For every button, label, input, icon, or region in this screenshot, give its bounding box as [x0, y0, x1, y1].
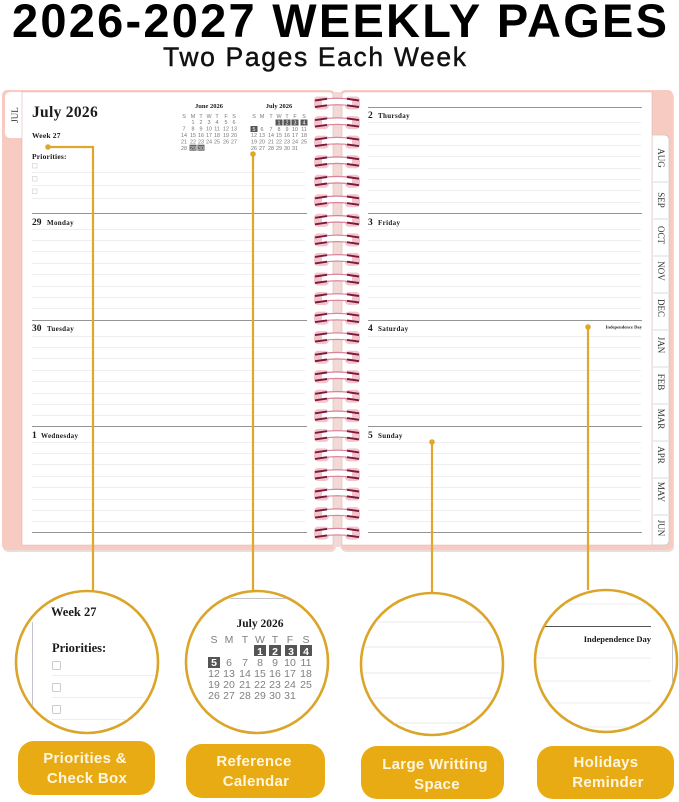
tab: JUL: JUL — [10, 107, 20, 123]
label: holidays reminder: Holidays — [574, 754, 638, 771]
mini calendar: July 2026: 18 — [301, 133, 307, 139]
label: large writing space — [361, 746, 504, 799]
tabs: months: APR — [656, 446, 666, 464]
mini calendar: July 2026: 25 — [301, 140, 307, 146]
label: priorities and check box — [18, 741, 155, 795]
mini calendar: July 2026: F — [293, 114, 297, 120]
magnifier: reference calendar: 10 — [284, 657, 296, 669]
mini calendar: July 2026: 13 — [259, 133, 265, 139]
mini calendar: June 2026: 15 — [190, 133, 196, 139]
magnifier: reference calendar: 22 — [254, 679, 266, 691]
label: large writing space: Large Writting — [382, 756, 488, 773]
magnifier: reference calendar: 15 — [254, 668, 266, 680]
mini calendar: July 2026: 24 — [292, 140, 298, 146]
tabs: months: AUG — [656, 148, 666, 168]
mini calendar: June 2026: T — [199, 114, 203, 120]
mini calendar: July 2026: S — [252, 114, 256, 120]
magnifier: reference calendar: S — [302, 634, 310, 646]
connector: reference calendar — [250, 151, 256, 592]
panel: right page — [342, 92, 652, 545]
day heading: Tuesday: Tuesday — [47, 325, 74, 333]
tab: JUL — [5, 92, 23, 138]
mini calendar: June 2026: 28 — [181, 146, 187, 152]
magnifier: reference calendar: 19 — [208, 679, 220, 691]
mini calendar: June 2026: 24 — [206, 140, 212, 146]
tabs: months: MAR — [656, 409, 666, 429]
mini calendar: June 2026: 29 — [190, 146, 196, 152]
label: holidays reminder: Reminder — [572, 774, 644, 791]
magnifier: reference calendar: 24 — [284, 679, 296, 691]
magnifier: priorities and check box — [16, 591, 158, 733]
mini calendar: June 2026: 3 — [208, 120, 210, 126]
magnifier: reference calendar: 2 — [272, 646, 278, 658]
mini calendar: June 2026: 11 — [214, 126, 220, 132]
mini calendar: July 2026: 11 — [301, 127, 307, 133]
mini calendar: July 2026: 17 — [292, 133, 298, 139]
day heading: Monday — [32, 218, 74, 228]
month heading: July 2026 — [32, 104, 98, 121]
mini calendar: July 2026 — [250, 103, 308, 152]
mini calendar: June 2026: June 2026 — [195, 103, 224, 110]
mini calendar: June 2026: 30 — [198, 146, 204, 152]
label: priorities and check box: Check Box — [47, 770, 127, 787]
magnifier: reference calendar: 8 — [257, 657, 263, 669]
mini calendar: July 2026: 10 — [292, 127, 298, 133]
mini calendar: June 2026: 27 — [231, 140, 237, 146]
label: reference calendar: Calendar — [223, 773, 289, 790]
magnifier: holidays reminder: Independence Day — [584, 634, 652, 644]
mini calendar: July 2026: 5 — [252, 127, 256, 133]
mini calendar: June 2026: 1 — [192, 120, 194, 126]
magnifier: large writing space — [355, 593, 510, 735]
magnifier: reference calendar: 6 — [226, 657, 232, 669]
mini calendar: July 2026: S — [302, 114, 306, 120]
mini calendar: June 2026: 20 — [231, 133, 237, 139]
mini calendar: June 2026: 7 — [182, 126, 186, 132]
mini calendar: July 2026: 9 — [286, 127, 288, 133]
tabs: months: DEC — [656, 299, 666, 317]
subtitle: Two Pages Each Week — [163, 42, 467, 72]
mini calendar: June 2026: 22 — [190, 140, 196, 146]
mini calendar: June 2026: 5 — [224, 120, 228, 126]
mini calendar: July 2026: 4 — [302, 120, 306, 126]
day heading: Monday: 29 — [32, 218, 42, 228]
tabs: months: OCT — [656, 226, 666, 245]
holiday note: Independence Day — [606, 324, 643, 330]
mini calendar: July 2026: 27 — [259, 146, 265, 152]
magnifier: reference calendar: W — [255, 634, 265, 646]
mini calendar: June 2026: 10 — [206, 126, 212, 132]
mini calendar: July 2026: 1 — [278, 120, 280, 126]
mini calendar: July 2026: 19 — [251, 140, 257, 146]
mini calendar: June 2026: 21 — [181, 140, 187, 146]
mini calendar: June 2026: 16 — [198, 133, 204, 139]
day heading: Monday: Monday — [47, 219, 74, 227]
label: holidays reminder — [537, 746, 674, 799]
magnifier: reference calendar: 12 — [208, 668, 220, 680]
mini calendar: July 2026: 15 — [276, 133, 282, 139]
mini calendar: July 2026: 20 — [259, 140, 265, 146]
mini calendar: June 2026: 26 — [223, 140, 229, 146]
tabs: months: MAY — [656, 482, 666, 503]
magnifier: reference calendar: M — [225, 634, 233, 646]
mini calendar: June 2026: W — [206, 114, 212, 120]
mini calendar: July 2026: 7 — [270, 127, 272, 133]
magnifier: reference calendar: F — [287, 634, 293, 646]
mini calendar: July 2026: July 2026 — [266, 103, 293, 110]
mini calendar: June 2026: 23 — [198, 140, 204, 146]
mini calendar: June 2026: 18 — [214, 133, 220, 139]
tabs: months: JAN — [656, 337, 666, 354]
magnifier: reference calendar: 4 — [303, 646, 309, 658]
tabs: months: FEB — [656, 374, 666, 390]
magnifier: reference calendar: 25 — [300, 679, 312, 691]
mini calendar: June 2026: T — [215, 114, 219, 120]
connector: holidays — [585, 324, 591, 590]
magnifier: reference calendar: 23 — [269, 679, 281, 691]
day heading: Wednesday — [32, 431, 79, 441]
mini calendar: July 2026: 29 — [276, 146, 282, 152]
mini calendar: June 2026: 17 — [206, 133, 212, 139]
mini calendar: July 2026: 21 — [268, 140, 274, 146]
mini calendar: June 2026: 6 — [232, 120, 236, 126]
tabs: months — [652, 135, 669, 545]
magnifier: reference calendar: 21 — [239, 679, 251, 691]
magnifier: reference calendar: 29 — [254, 690, 266, 702]
magnifier: reference calendar: 28 — [239, 690, 251, 702]
mini calendar: July 2026: 23 — [284, 140, 290, 146]
day heading: Wednesday: 1 — [32, 431, 37, 441]
mini calendar: July 2026: 26 — [251, 146, 257, 152]
mini calendar: July 2026: 31 — [292, 146, 298, 152]
magnifier: priorities and check box: Week 27 — [51, 605, 96, 619]
spiral binding — [314, 96, 360, 540]
mini calendar: June 2026: S — [182, 114, 186, 120]
day heading: Sunday: 5 — [368, 431, 373, 441]
magnifier: reference calendar: S — [210, 634, 218, 646]
mini calendar: June 2026: 4 — [216, 120, 218, 126]
magnifier: reference calendar: 11 — [301, 657, 312, 669]
mini calendar: July 2026: 8 — [278, 127, 280, 133]
day heading: Sunday — [368, 431, 403, 441]
magnifier: reference calendar: July 2026 — [237, 618, 284, 630]
day heading: Thursday — [368, 111, 410, 121]
magnifier: reference calendar: 1 — [257, 646, 263, 658]
mini calendar: June 2026: 8 — [192, 126, 194, 132]
day heading: Tuesday — [32, 324, 74, 334]
day heading: Saturday: 4 — [368, 324, 373, 334]
mini calendar: July 2026: 30 — [284, 146, 290, 152]
magnifier: reference calendar: 14 — [239, 668, 251, 680]
magnifier: holidays reminder — [530, 590, 677, 732]
magnifier: reference calendar: 9 — [272, 657, 278, 669]
mini calendar: July 2026: 12 — [251, 133, 257, 139]
mini calendar: July 2026: T — [285, 114, 289, 120]
mini calendar: July 2026: 14 — [268, 133, 274, 139]
mini calendar: June 2026: 13 — [231, 126, 237, 132]
mini calendar: July 2026: 3 — [294, 120, 296, 126]
mini calendar: July 2026: W — [276, 114, 282, 120]
magnifier: reference calendar: 13 — [223, 668, 235, 680]
panel: planner cover — [2, 90, 674, 552]
magnifier: reference calendar: 16 — [269, 668, 281, 680]
mini calendar: July 2026: 22 — [276, 140, 282, 146]
mini calendar: June 2026: M — [191, 114, 196, 120]
mini calendar: July 2026: 2 — [286, 120, 288, 126]
label: large writing space: Space — [414, 776, 460, 793]
day heading: Thursday: Thursday — [378, 112, 410, 120]
magnifier: reference calendar: 27 — [223, 690, 235, 702]
magnifier: reference calendar: T — [242, 634, 249, 646]
day heading: Tuesday: 30 — [32, 324, 42, 334]
mini calendar: June 2026: 14 — [181, 133, 187, 139]
day heading: Saturday: Saturday — [378, 325, 409, 333]
magnifier: priorities and check box: Priorities: — [52, 641, 106, 655]
mini calendar: July 2026: T — [269, 114, 273, 120]
connector: week and priorities — [45, 144, 93, 592]
label: priorities and check box: Priorities & — [43, 750, 127, 767]
magnifier: reference calendar: 7 — [242, 657, 248, 669]
day heading: Friday — [368, 218, 400, 228]
mini calendar: July 2026: 6 — [260, 127, 264, 133]
magnifier: reference calendar: 3 — [288, 646, 294, 658]
mini calendar: June 2026: 19 — [223, 133, 229, 139]
mini calendar: June 2026: S — [232, 114, 236, 120]
magnifier: reference calendar: 26 — [208, 690, 220, 702]
magnifier: reference calendar: 18 — [300, 668, 312, 680]
panel: left page — [22, 92, 333, 545]
mini calendar: July 2026: M — [260, 114, 265, 120]
magnifier: reference calendar — [186, 591, 328, 733]
magnifier: reference calendar: 17 — [284, 668, 296, 680]
label: reference calendar: Reference — [216, 753, 292, 770]
ruled lines: right page — [368, 108, 642, 532]
day heading: Wednesday: Wednesday — [41, 432, 79, 440]
magnifier: reference calendar: 31 — [284, 690, 296, 702]
tabs: months: NOV — [656, 261, 666, 281]
connector: writing space — [429, 439, 435, 594]
mini calendar: June 2026: F — [224, 114, 228, 120]
day heading: Thursday: 2 — [368, 111, 373, 121]
magnifier: reference calendar: 20 — [223, 679, 235, 691]
priorities with check boxes: Priorities: — [32, 152, 67, 161]
tabs: months: JUN — [656, 520, 666, 537]
magnifier: reference calendar: T — [272, 634, 279, 646]
ruled lines: left page — [32, 214, 307, 532]
mini calendar: June 2026: 9 — [200, 126, 202, 132]
magnifier: reference calendar: 30 — [269, 690, 281, 702]
priorities with check boxes — [32, 152, 305, 198]
day heading: Friday: 3 — [368, 218, 373, 228]
mini calendar: June 2026: 25 — [214, 140, 220, 146]
week label: Week 27 — [32, 131, 61, 140]
tabs: months: SEP — [656, 192, 666, 208]
label: reference calendar — [186, 744, 325, 798]
magnifier: reference calendar: 5 — [211, 657, 217, 669]
mini calendar: June 2026: 12 — [223, 126, 229, 132]
mini calendar: June 2026: 2 — [200, 120, 202, 126]
mini calendar: June 2026 — [181, 103, 237, 152]
day heading: Sunday: Sunday — [378, 432, 403, 440]
mini calendar: July 2026: 28 — [268, 146, 274, 152]
mini calendar: July 2026: 16 — [284, 133, 290, 139]
day heading: Saturday — [368, 324, 409, 334]
day heading: Friday: Friday — [378, 219, 400, 227]
